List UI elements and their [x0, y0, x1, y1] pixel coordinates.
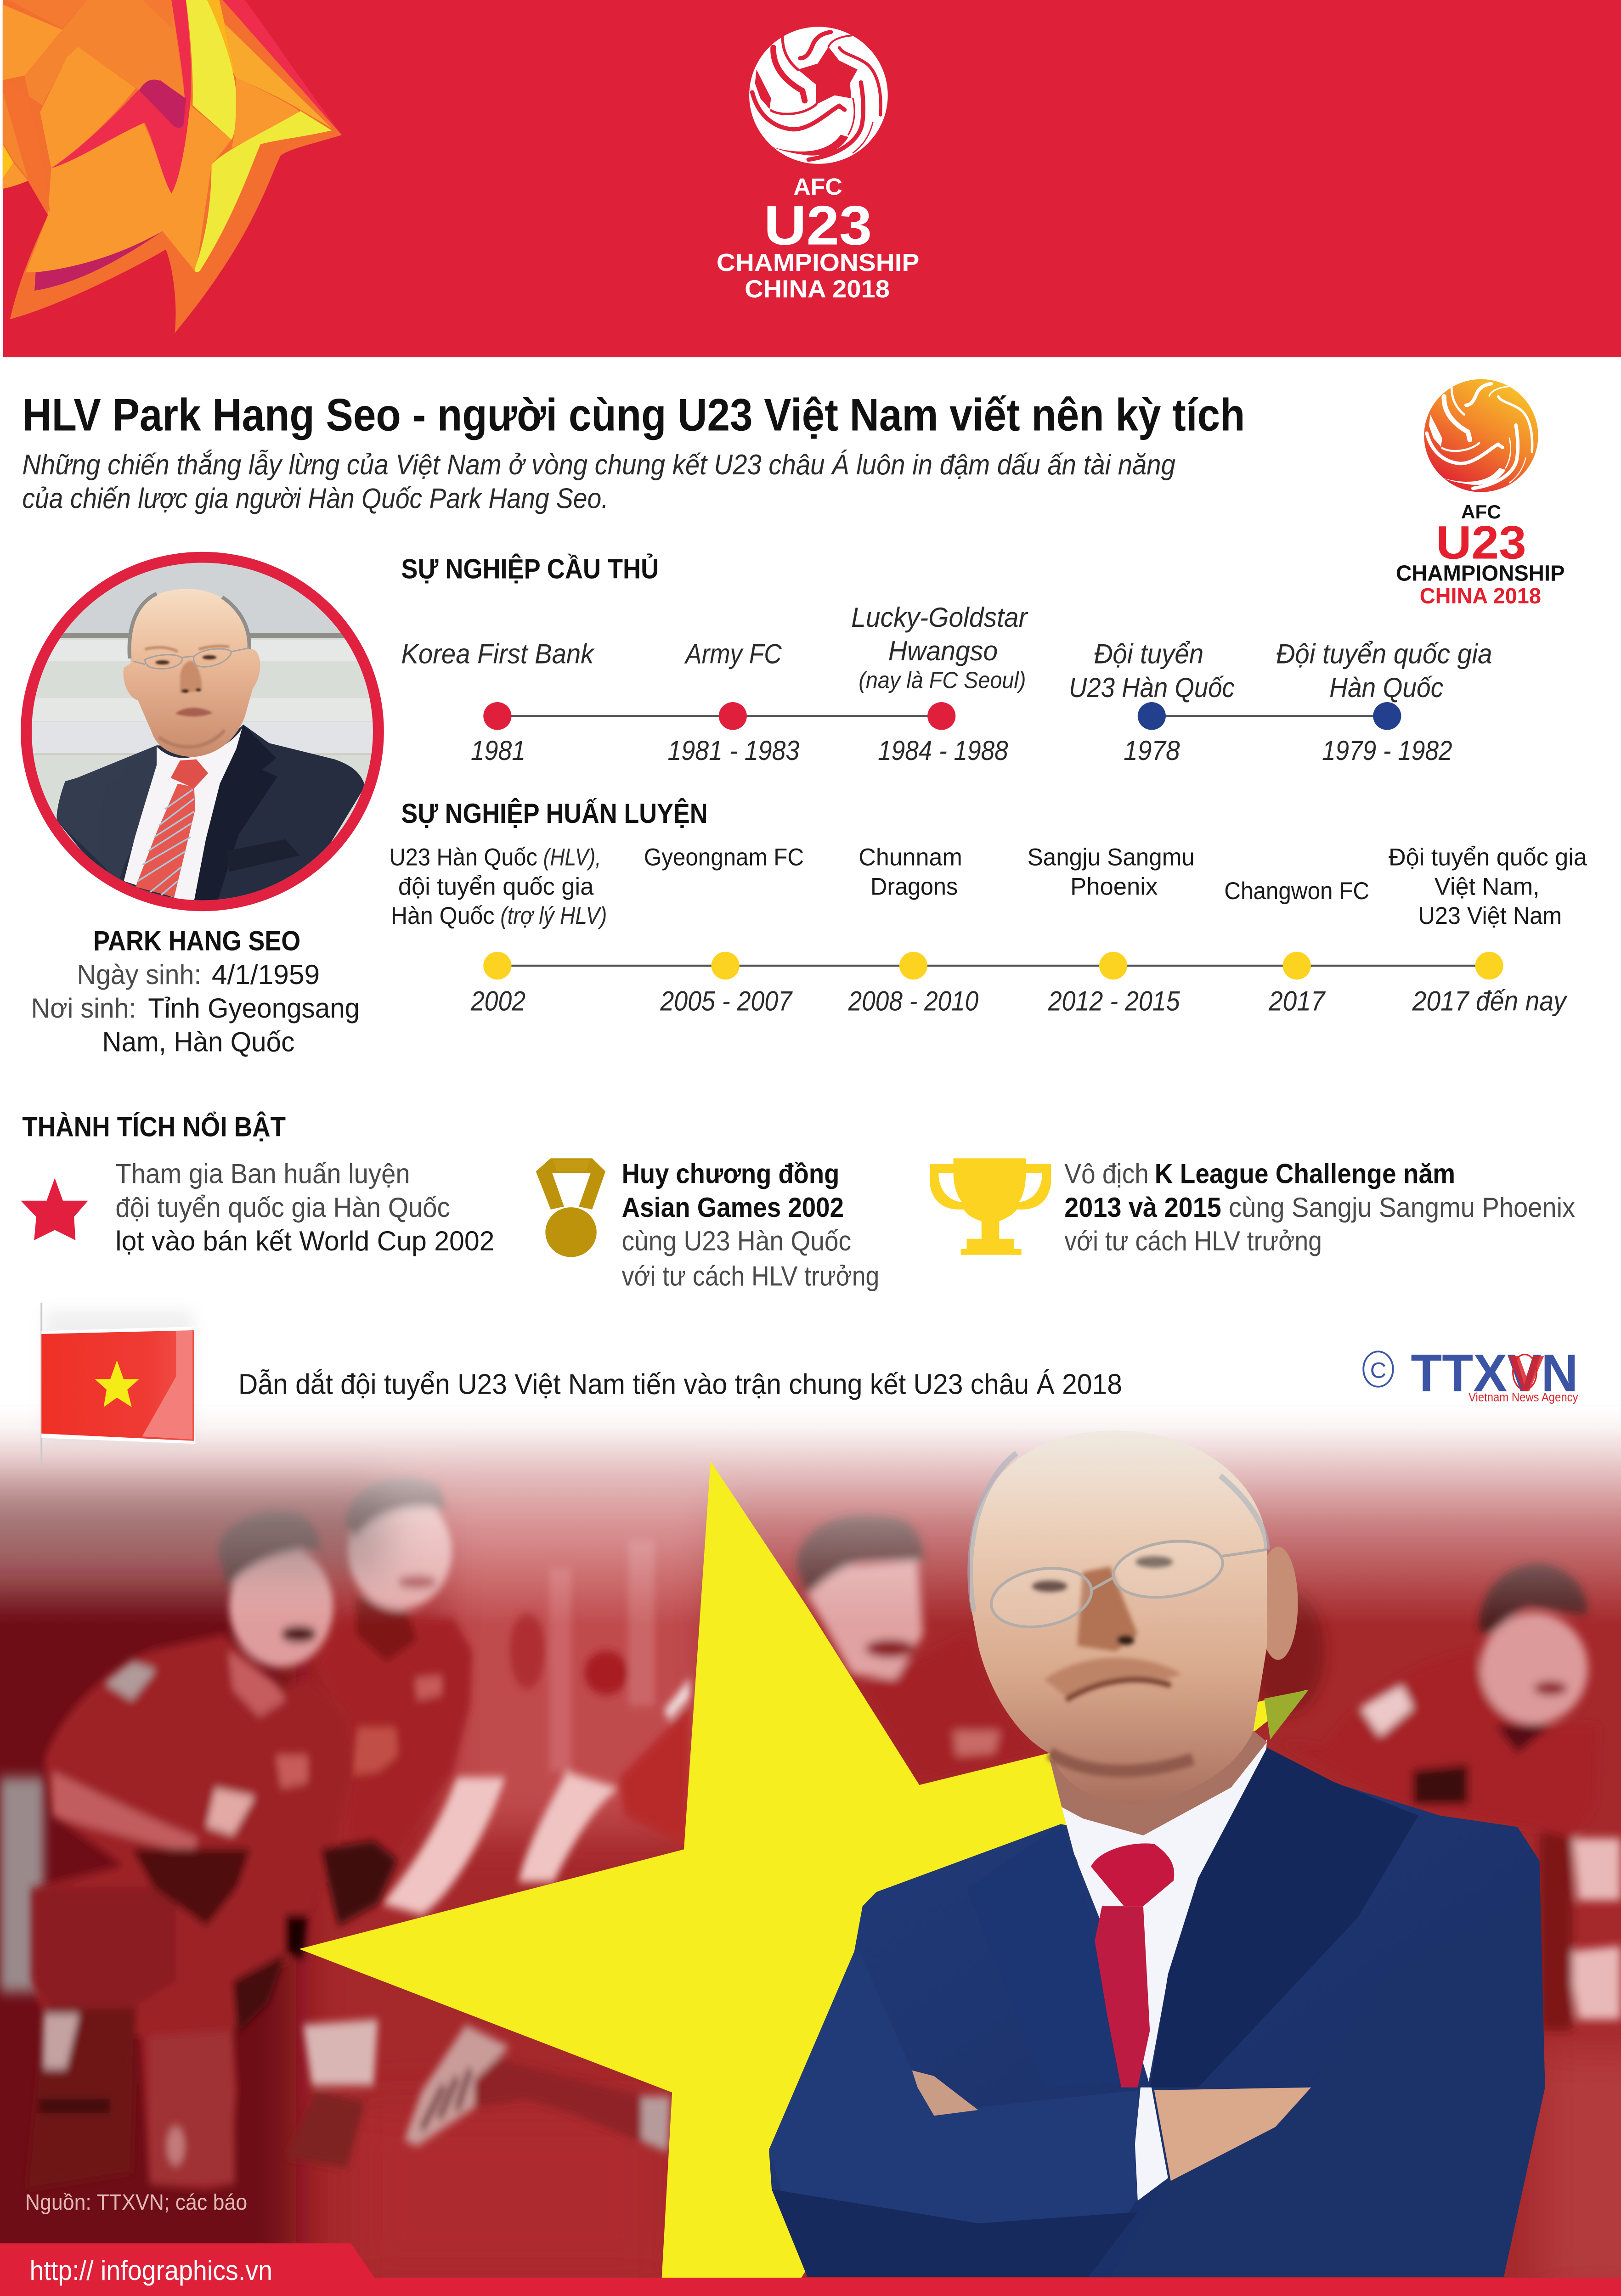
timeline: player career: Korea First Bank — [401, 638, 595, 669]
timeline: coaching career: Phoenix — [1070, 873, 1158, 900]
player 19 — [316, 1477, 472, 1854]
colour logo wordmark: CHAMPIONSHIP — [1396, 561, 1565, 585]
achievement text: với tư cách HLV trưởng — [1064, 1226, 1322, 1256]
timeline: player career: Hàn Quốc — [1329, 672, 1443, 703]
timeline: coaching career: U23 Hàn Quốc — [390, 844, 537, 871]
player 17 — [26, 1510, 398, 2190]
big yellow star — [299, 1461, 1307, 2279]
timeline: coaching career: Dragons — [870, 873, 958, 900]
logo wordmark: AFC — [793, 174, 842, 200]
colour logo wordmark: U23 — [1436, 516, 1526, 568]
flag star — [95, 1360, 139, 1407]
achievement: Asian Games — [536, 1158, 879, 1292]
TTXVN logo: Vietnam News Agency — [1469, 1391, 1578, 1404]
suit — [769, 1748, 1545, 2277]
player 4 — [1281, 1564, 1621, 2031]
person details: Nam, Hàn Quốc — [102, 1026, 294, 1057]
source credit: Nguồn: TTXVN; các báo — [25, 2190, 247, 2215]
left players group — [0, 1477, 690, 2190]
achievement text — [1064, 1158, 1575, 1256]
achievement text: Huy chương đồng — [622, 1158, 839, 1189]
title: HLV Park Hang Seo - người cùng U23 Việt Nam viết nên kỳ tích — [22, 390, 1245, 440]
timeline: coaching career: 2017 — [1268, 985, 1326, 1016]
person details: PARK HANG SEO — [93, 925, 300, 956]
colour football emblem — [1424, 379, 1538, 492]
footer bar — [0, 2243, 1621, 2296]
player arm behind star — [620, 1678, 690, 1849]
face details — [1032, 1556, 1193, 1771]
shirt — [124, 728, 242, 904]
cuff — [1135, 2088, 1168, 2200]
timeline: coaching career: 2008 - 2010 — [848, 985, 978, 1016]
logo wordmark: U23 — [764, 194, 872, 256]
achievement: World Cup 2002 — [21, 1158, 494, 1256]
subtitle: của chiến lược gia người Hàn Quốc Park Hang Seo. — [22, 483, 609, 514]
achievement text — [622, 1158, 879, 1292]
timeline: coaching career: (trợ lý HLV) — [500, 902, 607, 929]
header banner — [3, 0, 1621, 357]
colour logo wordmark: CHINA 2018 — [1420, 584, 1541, 608]
final headline: Dẫn dắt đội tuyển U23 Việt Nam tiến vào trận chung kết U23 châu Á 2018 — [238, 1368, 1122, 1401]
achievement text: cùng Sangju Sangmu Phoenix — [1229, 1192, 1575, 1223]
timeline: coaching career: đội tuyển quốc gia — [398, 873, 594, 900]
achievement text: 2013 và 2015 — [1064, 1192, 1221, 1223]
subtitle: Những chiến thắng lẫy lừng của Việt Nam ở vòng chung kết U23 châu Á luôn in đậm dấu ấn tài năng — [22, 449, 1175, 481]
timeline: player career: Lucky-Goldstar — [851, 602, 1028, 633]
icon: trophy — [930, 1158, 1051, 1255]
lapels — [194, 725, 277, 900]
person details: 4/1/1959 — [212, 959, 320, 990]
portrait — [18, 550, 393, 920]
achievement text: lọt vào bán kết World Cup 2002 — [115, 1226, 494, 1256]
timeline: coaching career: 2002 — [470, 985, 525, 1016]
achievement text: Asian Games 2002 — [622, 1192, 844, 1223]
timeline: coaching career: U23 Việt Nam — [1418, 902, 1562, 929]
footer url: http:// infographics.vn — [29, 2255, 272, 2286]
achievement text: đội tuyển quốc gia Hàn Quốc — [115, 1192, 450, 1223]
timeline: player career — [401, 602, 1492, 766]
timeline: player career: Đội tuyển quốc gia — [1276, 638, 1492, 669]
timeline: coaching career: Đội tuyển quốc gia — [1389, 844, 1587, 871]
white streaks — [382, 1541, 655, 1915]
right players group — [796, 1514, 1621, 2031]
top fade to white — [0, 1406, 1621, 1626]
colour logo wordmark: AFC — [1461, 501, 1501, 523]
timeline: coaching career: 2012 - 2015 — [1048, 985, 1180, 1016]
achievement text: Vô địch — [1064, 1158, 1149, 1189]
timeline: player career: Army FC — [684, 638, 782, 669]
logo wordmark: CHINA 2018 — [745, 275, 890, 303]
lapels — [967, 1824, 1118, 2088]
timeline: player career: 1978 — [1124, 735, 1180, 766]
timeline: coaching career — [390, 844, 1587, 1016]
heading: coaching career: SỰ NGHIỆP HUẤN LUYỆN — [401, 798, 708, 829]
left hand — [912, 2071, 978, 2116]
AFC U23 logo white — [717, 27, 919, 303]
achievement text: K League Challenge năm — [1155, 1158, 1455, 1189]
player leg and boot — [286, 2020, 670, 2168]
colour logo wordmark — [1396, 501, 1565, 608]
timeline: player career: 1981 - 1983 — [667, 735, 799, 766]
person details: Tỉnh Gyeongsang — [148, 992, 360, 1024]
AFC U23 logo colour — [1396, 379, 1565, 608]
face details — [145, 646, 229, 747]
shirt — [1062, 1739, 1267, 2082]
football emblem — [749, 27, 888, 164]
glasses — [987, 1535, 1267, 1635]
timeline: player career: Hwangso — [888, 635, 998, 666]
TTXVN logo: C — [1370, 1358, 1386, 1383]
TTXVN logo: TTXVN — [1411, 1344, 1578, 1402]
heading: achievements: THÀNH TÍCH NỔI BẬT — [22, 1111, 286, 1142]
flag — [41, 1303, 195, 1467]
icon: medal — [536, 1158, 605, 1257]
timeline: player career: 1984 - 1988 — [878, 735, 1008, 766]
timeline: coaching career: (HLV), — [543, 844, 601, 871]
grey wall block — [0, 1777, 44, 1992]
tie — [136, 760, 208, 897]
subtitle — [22, 449, 1175, 514]
right sleeve — [1110, 1889, 1545, 2277]
heading: player career: SỰ NGHIỆP CẦU THỦ — [401, 553, 659, 584]
tie — [1091, 1843, 1174, 2088]
right hand — [1154, 2088, 1311, 2181]
timeline: coaching career: Việt Nam, — [1435, 873, 1540, 900]
left sleeve — [769, 1946, 1143, 2277]
timeline: player career: 1981 — [471, 735, 525, 766]
timeline: player career: 1979 - 1982 — [1322, 735, 1452, 766]
icon: star — [21, 1178, 88, 1240]
bottom photo collage — [0, 1406, 1621, 2296]
head — [970, 1430, 1267, 1804]
red background — [0, 1406, 1621, 2279]
timeline: coaching career: 2017 đến nay — [1412, 985, 1568, 1016]
achievement text: cùng U23 Hàn Quốc — [622, 1226, 851, 1256]
grey haze upper left — [0, 1486, 385, 1574]
shade around coach — [1248, 1589, 1325, 1714]
timeline: coaching career: Chunnam — [859, 844, 962, 871]
background tones — [0, 1494, 1621, 2296]
neck — [1050, 1731, 1267, 1835]
achievement text — [115, 1158, 494, 1256]
coach figure — [769, 1430, 1545, 2277]
grey hair rim — [970, 1453, 1267, 1612]
person details: Nơi sinh: — [31, 992, 136, 1024]
logo wordmark — [717, 174, 919, 303]
timeline: player career: U23 Hàn Quốc — [1069, 672, 1235, 703]
timeline: coaching career: Hàn Quốc — [391, 902, 494, 929]
timeline: coaching career: Gyeongnam FC — [644, 844, 804, 871]
person details: Ngày sinh: — [77, 959, 201, 990]
ear — [1258, 1547, 1298, 1660]
timeline: coaching career: Sangju Sangmu — [1028, 844, 1195, 871]
decorative orange star — [3, 0, 342, 333]
player 3 — [796, 1514, 1039, 1784]
timeline: coaching career: Changwon FC — [1224, 878, 1369, 905]
timeline: coaching career: 2005 - 2007 — [660, 985, 793, 1016]
head — [124, 589, 260, 757]
suit — [57, 725, 365, 911]
logo wordmark: CHAMPIONSHIP — [717, 248, 919, 276]
achievement: K League — [930, 1158, 1575, 1256]
timeline: player career: (nay là FC Seoul) — [859, 667, 1026, 693]
glasses — [133, 648, 249, 669]
person details — [31, 925, 360, 1057]
timeline: player career: Đội tuyển — [1094, 638, 1203, 669]
achievement text: với tư cách HLV trưởng — [622, 1261, 879, 1292]
achievement text: Tham gia Ban huấn luyện — [115, 1158, 410, 1189]
